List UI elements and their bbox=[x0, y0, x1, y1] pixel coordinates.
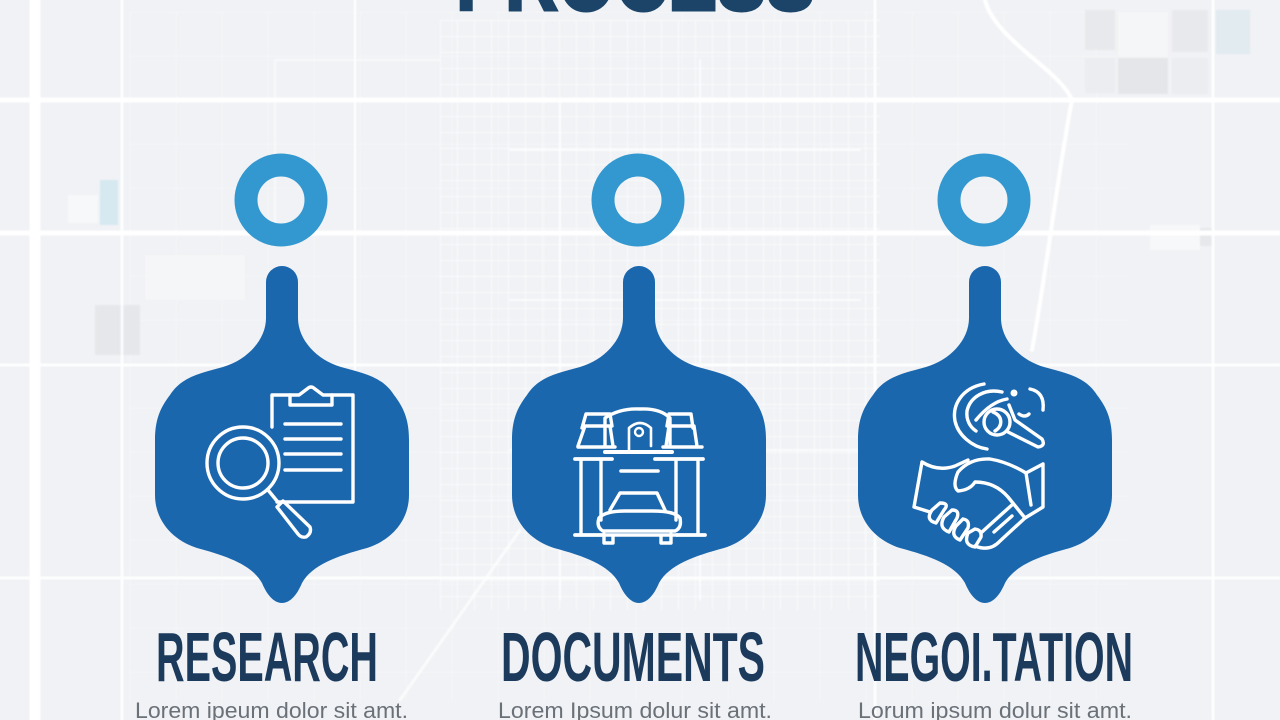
marker ring bbox=[246, 165, 316, 235]
icon: key and handshake bbox=[914, 384, 1043, 548]
icon: garage with car bbox=[575, 409, 705, 543]
pin shape bbox=[155, 266, 409, 603]
marker ring bbox=[603, 165, 673, 235]
icon: clipboard and magnifier bbox=[207, 387, 353, 537]
step 1: research bbox=[135, 165, 409, 720]
pin shape bbox=[858, 266, 1112, 603]
heading: DOCUMENTS bbox=[501, 618, 765, 696]
marker ring bbox=[949, 165, 1019, 235]
step 2: documents bbox=[498, 165, 772, 720]
heading: RESEARCH bbox=[156, 618, 378, 696]
step 3: negotiation bbox=[855, 165, 1133, 720]
pin shape bbox=[512, 266, 766, 603]
